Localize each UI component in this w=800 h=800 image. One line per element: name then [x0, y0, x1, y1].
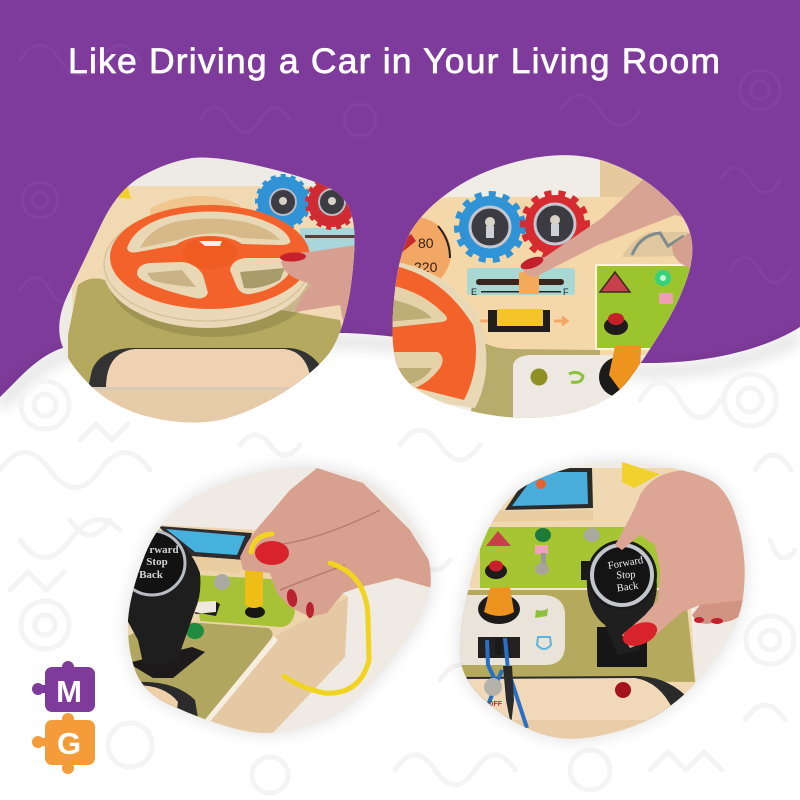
white wave lower background — [0, 327, 800, 800]
photo: shoelace cord — [128, 467, 431, 733]
fuel slider: E — [471, 287, 477, 297]
gear shifter: Forward — [607, 555, 645, 572]
gear shifter: Stop — [616, 570, 636, 582]
front wood edge — [462, 720, 702, 745]
blue gear — [457, 194, 523, 260]
logo: MG puzzle pieces — [32, 661, 95, 774]
yellow cord — [251, 534, 369, 693]
olive base — [470, 340, 600, 420]
steering wheel — [103, 205, 317, 337]
gear shifter: Back — [616, 580, 640, 594]
blue gear — [257, 176, 309, 228]
white control panel — [513, 355, 646, 418]
red gear — [523, 193, 587, 257]
key with blue strap — [484, 637, 527, 728]
pointing finger — [519, 178, 700, 280]
gear shifter — [119, 531, 205, 678]
orange speedometer — [396, 218, 451, 281]
wooden block top — [600, 160, 655, 197]
board top — [128, 525, 348, 720]
olive panel — [120, 620, 273, 722]
orange speedometer: 80 — [418, 235, 434, 251]
red gear — [307, 178, 357, 228]
puzzle piece M: M — [56, 674, 82, 709]
gauge slider — [300, 228, 356, 253]
fuel slider — [467, 268, 575, 297]
photo: fuel gauge slider — [392, 155, 692, 418]
orange speedometer: 220 — [414, 259, 438, 275]
wood side — [203, 597, 348, 738]
tablet — [490, 468, 593, 522]
window — [462, 676, 695, 722]
speedometer dial — [150, 196, 240, 215]
yellow rocker switch — [480, 309, 567, 332]
tablet — [158, 526, 252, 573]
hand holding wheel — [280, 245, 354, 322]
track scene — [622, 232, 688, 257]
steering wheel close-up — [385, 260, 486, 408]
gear shifter: rward — [149, 544, 179, 556]
hand — [240, 468, 433, 618]
hand — [615, 470, 747, 650]
green panel — [195, 575, 295, 627]
icon: yellow triangle — [118, 187, 131, 199]
green light — [186, 623, 204, 639]
photo: steering wheel — [59, 158, 354, 423]
window corner — [141, 682, 198, 716]
gear shifter: Back — [139, 569, 164, 581]
yellow peg — [245, 570, 265, 618]
white button — [194, 601, 220, 616]
soft shadows behind lower photos — [128, 462, 745, 739]
yellow star — [622, 462, 660, 488]
gear shifter — [587, 540, 657, 667]
puzzle piece G: G — [57, 726, 81, 761]
title: Like Driving a Car in Your Living Room — [68, 41, 720, 81]
fuel slider: F — [563, 287, 569, 297]
green panel — [480, 527, 665, 588]
purple header background — [0, 0, 800, 420]
key with blue strap: OFF — [488, 701, 503, 708]
gear shifter: Stop — [146, 556, 168, 568]
green panel — [595, 264, 700, 350]
photo: gear shifter — [460, 462, 745, 739]
white panel — [455, 587, 565, 665]
orange toggle knob — [599, 345, 641, 397]
olive lower panel — [458, 588, 695, 682]
